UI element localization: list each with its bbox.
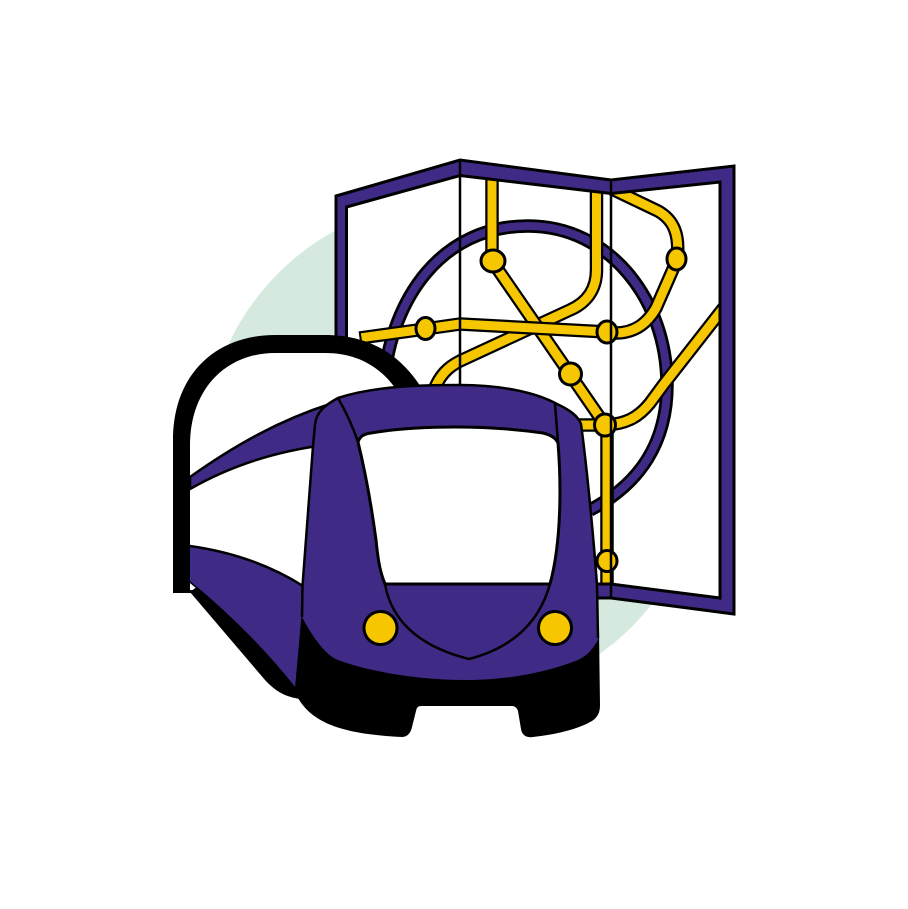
lower front black skirt <box>295 610 600 737</box>
right headlight <box>538 612 572 644</box>
yellow metro lines <box>360 178 725 592</box>
nose shield line <box>385 584 550 659</box>
map fold lines <box>460 160 611 598</box>
train underside <box>190 586 320 699</box>
left headlight <box>364 612 397 644</box>
metro stations <box>416 248 686 572</box>
train <box>173 335 600 737</box>
windscreen <box>358 427 560 584</box>
folded metro map <box>336 160 734 614</box>
tunnel-shaped train body outline <box>173 335 424 600</box>
map sheet <box>336 160 734 614</box>
front cab <box>302 385 598 680</box>
purple ring line <box>384 226 667 510</box>
lower side panel <box>190 546 330 688</box>
map frame <box>336 160 734 614</box>
side roof stripe <box>190 404 330 489</box>
mint background circle <box>205 200 705 700</box>
cab pillar lines <box>338 398 558 443</box>
train body interior <box>190 353 398 600</box>
